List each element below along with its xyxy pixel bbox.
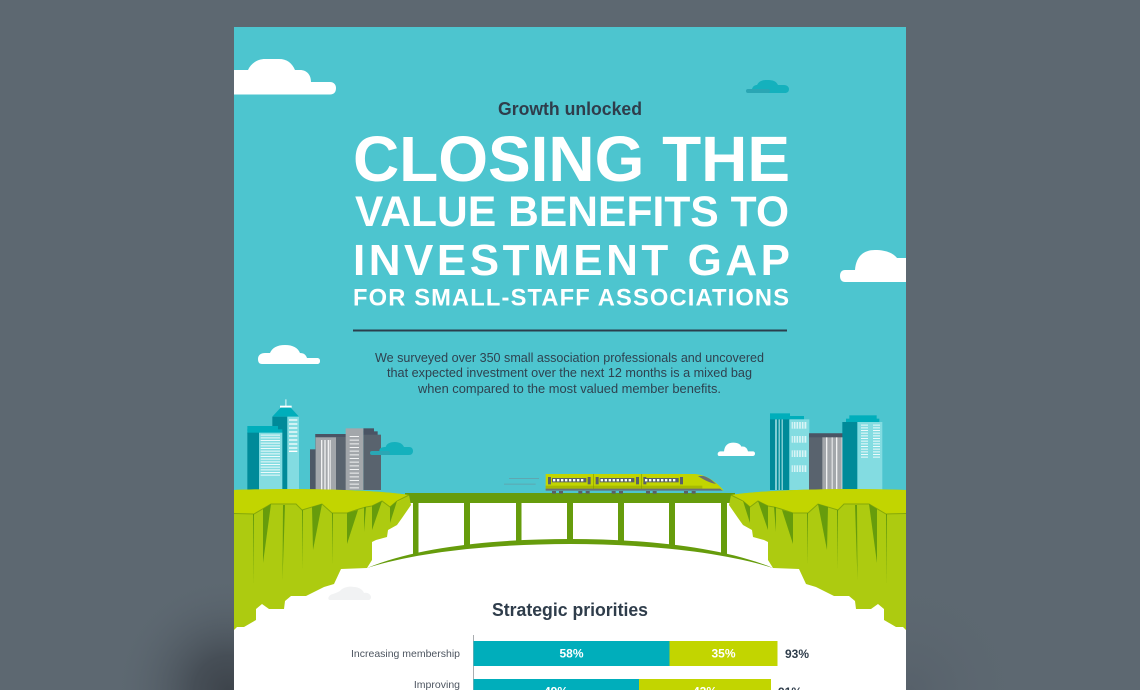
cloud: small white left	[258, 345, 320, 364]
speed lines	[504, 478, 539, 485]
bar: increasing membership	[351, 641, 809, 666]
panel: sky	[234, 27, 906, 497]
cliff: right	[729, 489, 906, 630]
title: VALUE BENEFITS TO	[355, 189, 789, 236]
title: FOR SMALL-STAFF ASSOCIATIONS	[353, 286, 789, 312]
cloud: top left	[234, 59, 336, 94]
cloud: small white right	[718, 443, 755, 456]
heading: strategic priorities: Strategic priorities	[492, 599, 648, 620]
bar: improving	[414, 679, 802, 690]
city: left skyline	[247, 399, 413, 490]
cloud: teal beside city	[370, 442, 413, 455]
title	[353, 123, 790, 312]
cliff: left	[234, 489, 411, 630]
bar: increasing membership: 58%	[559, 646, 584, 660]
cloud: right white	[840, 250, 906, 282]
title: CLOSING THE	[353, 123, 790, 195]
intro paragraph: when compared to the most valued member benefits.	[417, 382, 721, 396]
city: right skyline	[718, 413, 882, 490]
intro paragraph: We surveyed over 350 small association professionals and uncovered	[375, 351, 764, 365]
intro paragraph: that expected investment over the next 12 months is a mixed bag	[387, 366, 752, 380]
bar: increasing membership: 35%	[711, 646, 736, 660]
panel: white lower page	[234, 497, 906, 690]
bridge	[367, 493, 773, 568]
cloud: top right teal	[746, 80, 789, 93]
train	[546, 474, 724, 494]
cloud: faint grey under cliff	[328, 587, 371, 600]
bar: increasing membership: 93%	[785, 647, 809, 661]
bar: increasing membership: Increasing membership	[351, 648, 460, 660]
intro paragraph	[375, 351, 764, 396]
bar chart: strategic priorities	[351, 635, 809, 690]
subtitle: Growth unlocked	[498, 99, 642, 119]
title: INVESTMENT GAP	[353, 236, 790, 285]
